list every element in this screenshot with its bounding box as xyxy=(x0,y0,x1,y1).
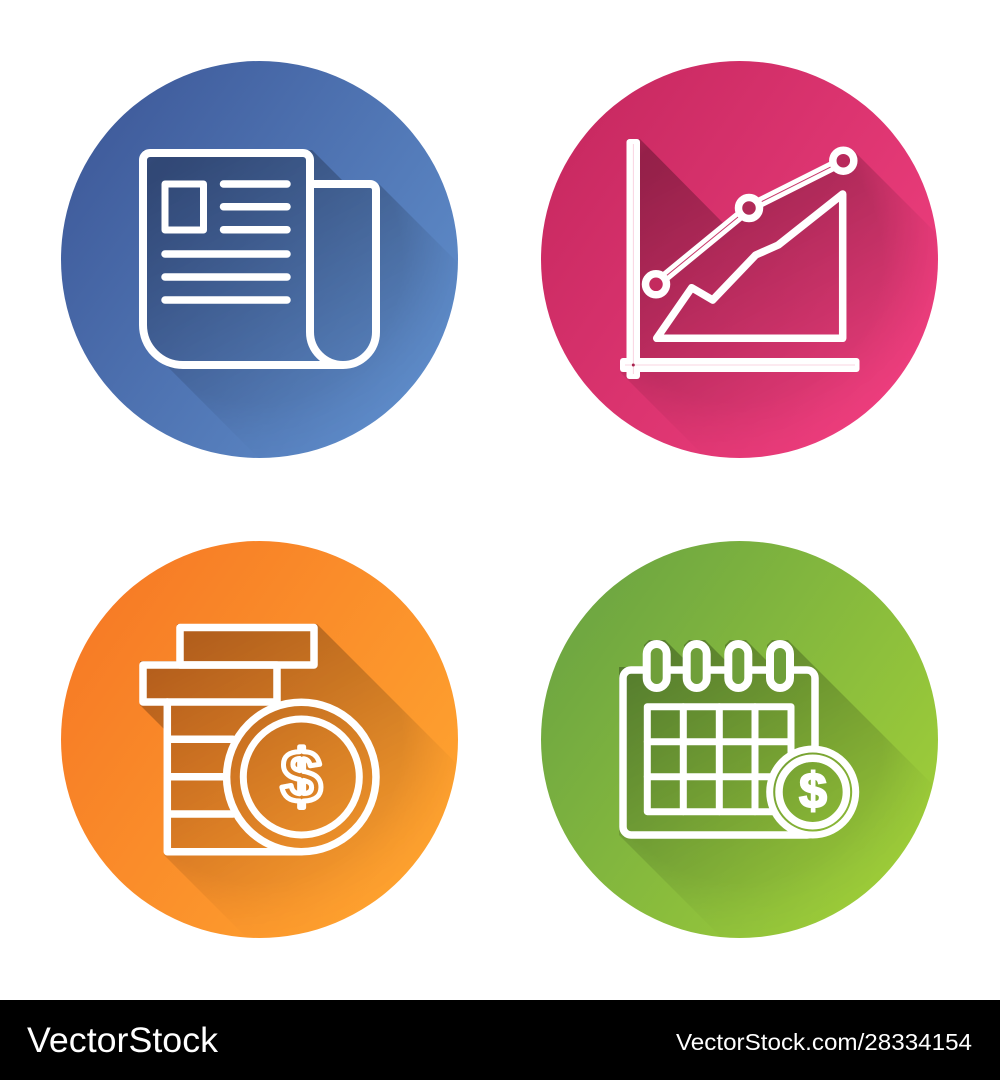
long shadow xyxy=(143,150,444,424)
chart axes xyxy=(620,139,860,379)
newspaper text lines xyxy=(165,184,287,300)
chart area xyxy=(657,194,843,338)
brand name: VectorStock xyxy=(27,1021,219,1060)
newspaper outline xyxy=(143,153,376,365)
calendar binder rings xyxy=(647,644,790,688)
green circle xyxy=(541,541,938,938)
newspaper image box xyxy=(165,184,204,230)
calendar body and grid xyxy=(623,670,815,835)
dollar coin: $ xyxy=(281,735,322,818)
blue circle xyxy=(61,61,458,458)
dollar coin xyxy=(227,702,376,852)
stacked bars xyxy=(143,628,314,852)
pink circle xyxy=(541,61,938,458)
panel: calendar icon xyxy=(541,541,938,938)
panel: newspaper icon xyxy=(61,61,458,458)
long shadow xyxy=(619,640,915,904)
chart trend line with points xyxy=(646,150,854,295)
footer bar xyxy=(0,1000,1000,1080)
panel: growth chart icon xyxy=(541,61,938,458)
image reference: VectorStock.com/28334154 xyxy=(676,1029,972,1055)
calendar dollar coin xyxy=(770,749,856,835)
long shadow xyxy=(620,139,928,428)
panel: coins icon xyxy=(61,541,458,938)
orange circle xyxy=(61,541,458,938)
long shadow xyxy=(140,624,444,910)
calendar dollar coin: $ xyxy=(799,763,827,819)
